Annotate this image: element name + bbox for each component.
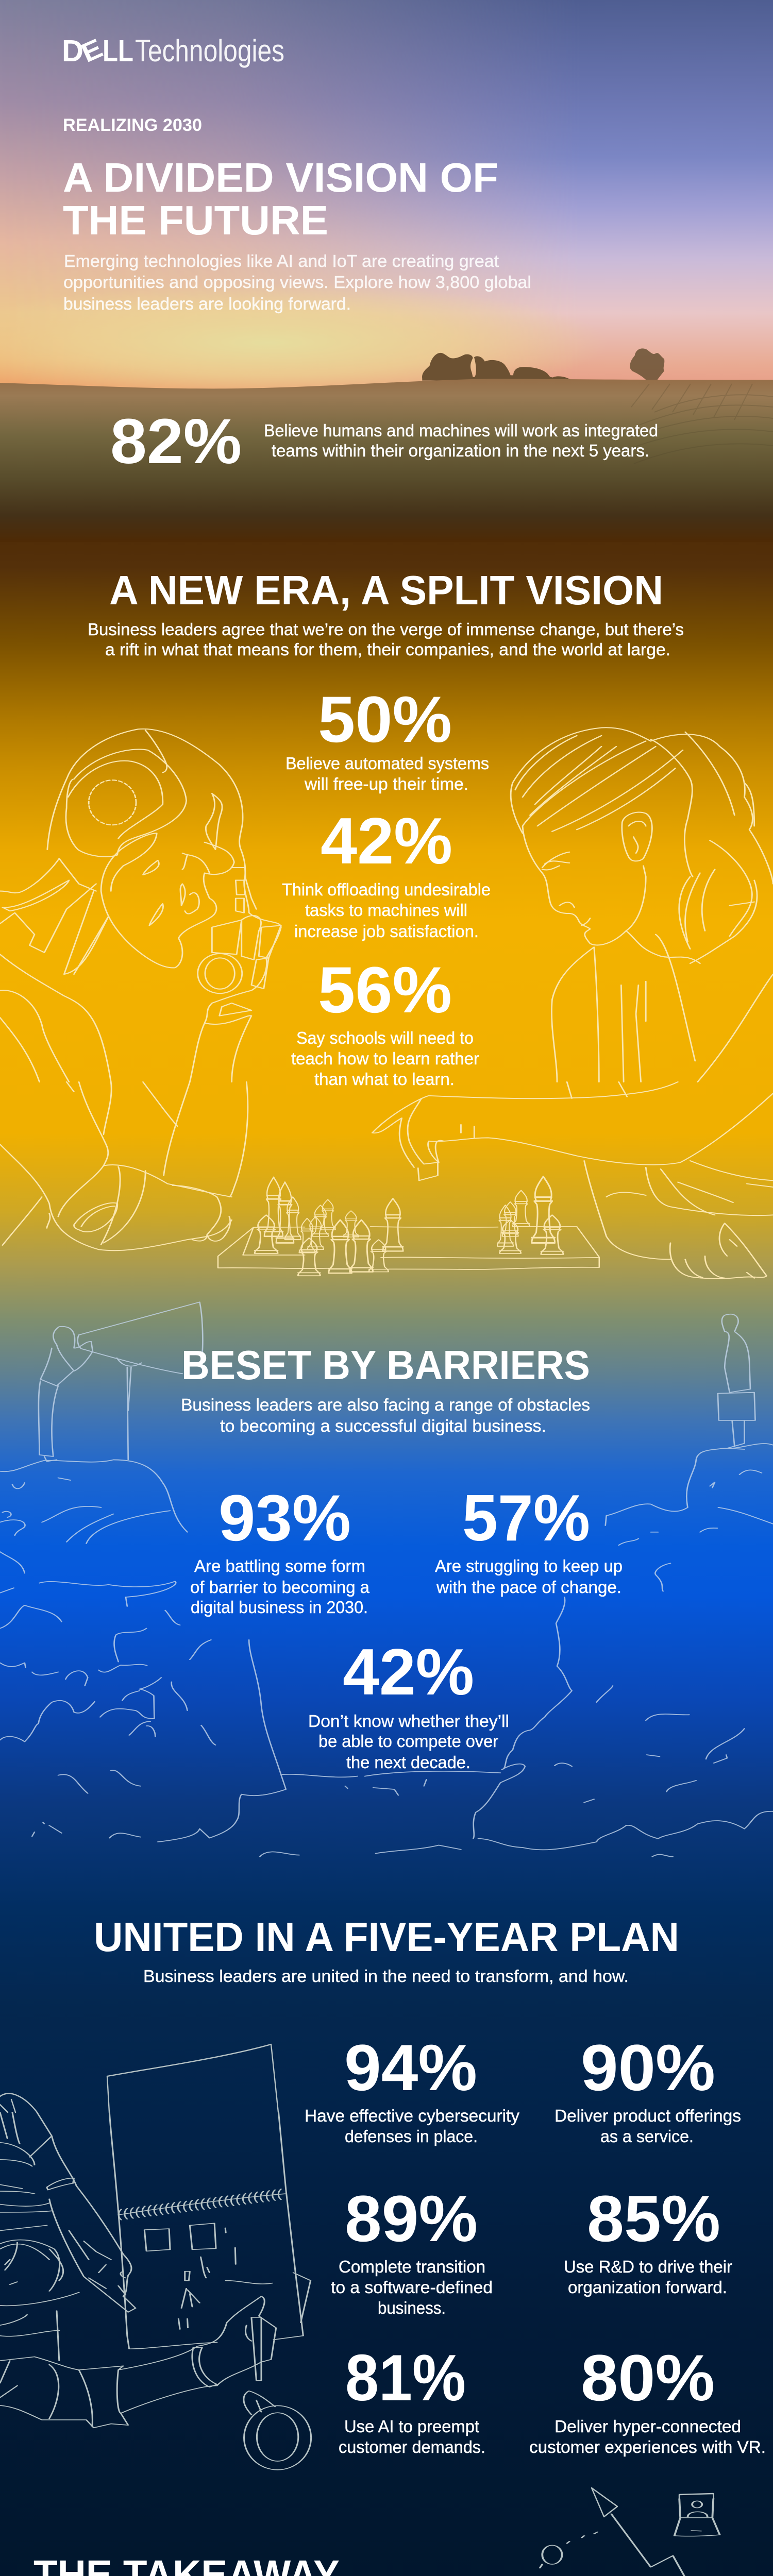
stat: 42% compete: the next decade. [346,1753,470,1772]
heading: a new era: A NEW ERA, A SPLIT VISION [109,567,663,613]
panel: hero sunrise sky photo [0,0,773,392]
stat: 85%: 85% [587,2182,720,2255]
intro text: business leaders are looking forward. [63,294,351,313]
stat: 85% [564,2182,732,2297]
stat: 89%: business. [378,2298,446,2317]
stat: 57%: Are struggling to keep up [435,1556,623,1575]
stat: 57%: 57% [462,1481,590,1554]
illustration: robot and woman facing each other [0,727,773,1082]
stat: 82%: 82% [110,406,242,477]
stat: 50%: 50% [318,683,452,756]
logo: Dell Technologies: Technologies [135,33,284,68]
icon: rising arrow head [592,2488,617,2517]
illustration: right cliff [606,1444,773,1591]
stat: 42% job satisfaction: 42% [321,804,452,877]
stat: 56%: Say schools will need to [296,1028,474,1047]
section intro: barriers: to becoming a successful digital business. [220,1416,546,1435]
stat: 93%: Are battling some form [194,1556,365,1575]
stat: 89% [331,2182,493,2317]
illustration: chasm cracks [0,1597,773,1857]
logo: Dell Technologies: D [62,34,83,68]
stat: 42% job satisfaction [282,804,491,941]
stat: 82%: Believe humans and machines will work as integrated [264,421,658,440]
stat: 94% [305,2031,519,2146]
illustration: chess game with robot and human arms [0,1082,773,1279]
stat: 93%: 93% [219,1481,351,1554]
illustration: notebook top edge and shoulder [0,2044,278,2112]
illustration: notebook spiral binding [119,2189,285,2220]
illustration: cliffs and figures divided by barriers [0,1302,773,1597]
stat: 90%: 90% [581,2031,715,2104]
icon: laptop top frame [679,2494,714,2499]
intro text: Emerging technologies like AI and IoT are creating great [64,251,499,270]
section intro: barriers: Business leaders are also facing a range of obstacles [181,1395,590,1414]
stat: 56%: 56% [318,953,452,1026]
stat: 81%: customer demands. [339,2437,485,2456]
intro text [63,251,531,313]
section intro: united: Business leaders are united in the need to transform, and how. [143,1967,629,1986]
section intro: barriers [181,1395,590,1435]
stat: 57% [435,1481,623,1597]
stat: 42% compete: be able to compete over [318,1732,498,1751]
illustration: chess board [218,1227,599,1269]
eyebrow: Realizing 2030: REALIZING 2030 [63,115,202,135]
icon: tree group on horizon [422,353,572,381]
stat: 42% compete: Don’t know whether they’ll [308,1711,509,1731]
stat: 56%: teach how to learn rather [291,1049,479,1068]
intro text: opportunities and opposing views. Explore how 3,800 global [63,273,531,292]
stat: 42% job satisfaction: Think offloading undesirable [282,880,491,899]
stat: 50%: will free-up their time. [304,774,468,793]
stat: 90% [554,2031,741,2146]
illustration: human arms and hand moving a piece [372,1082,773,1279]
stat: 94%: Have effective cybersecurity [305,2106,519,2125]
stat: 81%: 81% [345,2341,466,2414]
stat: 93% [190,1481,370,1617]
section intro: a new era: Business leaders agree that we’re on the verge of immense change, but there’s [88,620,684,639]
stat: 56%: than what to learn. [314,1070,455,1089]
stat: 89%: Complete transition [339,2257,485,2276]
stat: 57%: with the pace of change. [436,1578,621,1597]
heading: united in a five-year plan: UNITED IN A FIVE-YEAR PLAN [94,1914,679,1960]
stat: 80%: Deliver hyper-connected [554,2417,741,2436]
illustration: person sketching on notebook [0,2044,311,2470]
section intro: a new era: a rift in what that means for them, their companies, and the world at large. [105,640,670,659]
icon: coffee mug [244,2391,311,2470]
stat: 56% [291,953,479,1089]
stat: 93%: of barrier to becoming a [190,1578,370,1597]
title: THE FUTURE [63,197,328,243]
title [63,155,498,243]
illustration: robot arm [0,1082,248,1250]
illustration: notebook, arms, hand and mug [0,2112,311,2470]
panel: hero field photo [0,379,773,542]
stat: 89%: to a software-defined [331,2278,493,2297]
stat: 89%: 89% [345,2182,478,2255]
icon: lone tree on horizon [630,348,664,381]
section intro: a new era [88,620,684,659]
stat: 85%: Use R&D to drive their [564,2257,732,2276]
illustration: robot head and hand [0,729,281,1082]
stat: 50% [285,683,489,793]
stat: 94%: defenses in place. [345,2127,478,2146]
stat: 80%: 80% [581,2341,715,2414]
logo: Dell Technologies: LL [103,34,133,68]
stat: 42% compete: 42% [343,1635,474,1708]
stat: 50%: Believe automated systems [285,754,489,773]
heading: beset by barriers: BESET BY BARRIERS [181,1342,590,1388]
stat: 90%: Deliver product offerings [554,2106,741,2125]
stat: 42% job satisfaction: increase job satisfaction. [294,922,479,941]
title: A DIVIDED VISION OF [63,155,498,200]
stat: 81% [339,2341,485,2456]
stat: 81%: Use AI to preempt [344,2417,479,2436]
stat: 80%: customer experiences with VR. [529,2437,766,2456]
stat: 94%: 94% [344,2031,477,2104]
illustration: doodle shapes [433,2499,769,2576]
stat: 42% job satisfaction: tasks to machines will [305,901,467,920]
stat: 82%: teams within their organization in the next 5 years. [272,441,649,460]
logo: Dell Technologies [62,33,284,69]
illustration: man with briefcase [718,1314,755,1449]
illustration: woman with megaphone [39,1302,203,1462]
stat: 90%: as a service. [600,2127,694,2146]
illustration: left cliff [0,1460,188,1597]
stat: 85%: organization forward. [568,2278,727,2297]
stat: 80% [529,2341,766,2456]
illustration: takeaway doodles [433,2488,769,2576]
stat: 93%: digital business in 2030. [191,1598,368,1617]
illustration: woman in profile [511,727,773,1082]
stat: 82% [110,406,658,477]
logo: Dell Technologies: E [77,33,107,69]
illustration: chess pieces [255,1177,563,1276]
stat: 42% compete [308,1635,509,1772]
